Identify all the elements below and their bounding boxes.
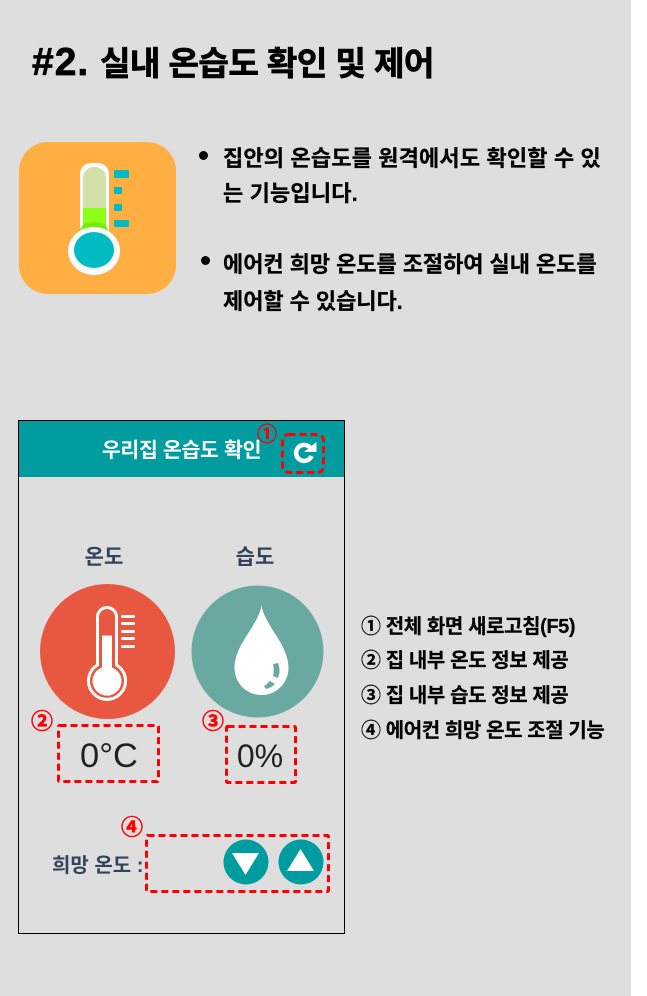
callout number 2: ② — [31, 704, 53, 736]
icon: temperature circle — [40, 584, 175, 719]
legend list: ④ 에어컨 희망 온도 조절 기능 — [361, 720, 604, 742]
icon: humidity circle — [192, 586, 324, 718]
title: #2. — [32, 41, 89, 84]
bullet dot 2 — [201, 256, 210, 265]
callout box 3 — [226, 726, 296, 782]
button: increase — [278, 840, 324, 884]
bullet 2 text: 제어할 수 있습니다. — [223, 289, 403, 314]
button: decrease — [224, 840, 268, 884]
icon: refresh — [296, 442, 316, 461]
title: 실내 온습도 확인 및 제어 — [100, 46, 434, 83]
bullet 2 text: 에어컨 희망 온도를 조절하여 실내 온도를 — [223, 252, 597, 277]
header title: 우리집 온습도 확인 — [102, 439, 261, 462]
value: temperature: 0°C — [80, 737, 138, 775]
label: temperature: 온도 — [85, 546, 123, 569]
panel header bar — [19, 421, 344, 477]
label: desired temperature: 희망 온도 : — [52, 854, 143, 877]
bullet list — [199, 146, 601, 314]
callout box 2 — [58, 726, 158, 782]
callout box 4 — [146, 836, 328, 892]
callout number 3: ③ — [202, 704, 224, 736]
bullet dot 1 — [199, 151, 208, 160]
value: humidity: 0% — [237, 738, 283, 774]
callout number 4: ④ — [121, 810, 143, 842]
bullet 1 text: 집안의 온습도를 원격에서도 확인할 수 있 — [223, 146, 601, 170]
legend list — [361, 616, 604, 742]
label: humidity: 습도 — [236, 546, 274, 569]
callout box 1 — [282, 434, 324, 472]
legend list: ① 전체 화면 새로고침(F5) — [361, 616, 575, 638]
bullet 1 text: 는 기능입니다. — [223, 180, 358, 206]
bullet 1 text — [223, 146, 601, 206]
legend list: ② 집 내부 온도 정보 제공 — [361, 650, 568, 672]
bullet 2 text — [223, 252, 597, 314]
callout number 1: ① — [257, 418, 277, 447]
legend list: ③ 집 내부 습도 정보 제공 — [361, 685, 568, 707]
icon: thermometer app — [19, 142, 176, 294]
panel: phone screen — [18, 418, 344, 934]
